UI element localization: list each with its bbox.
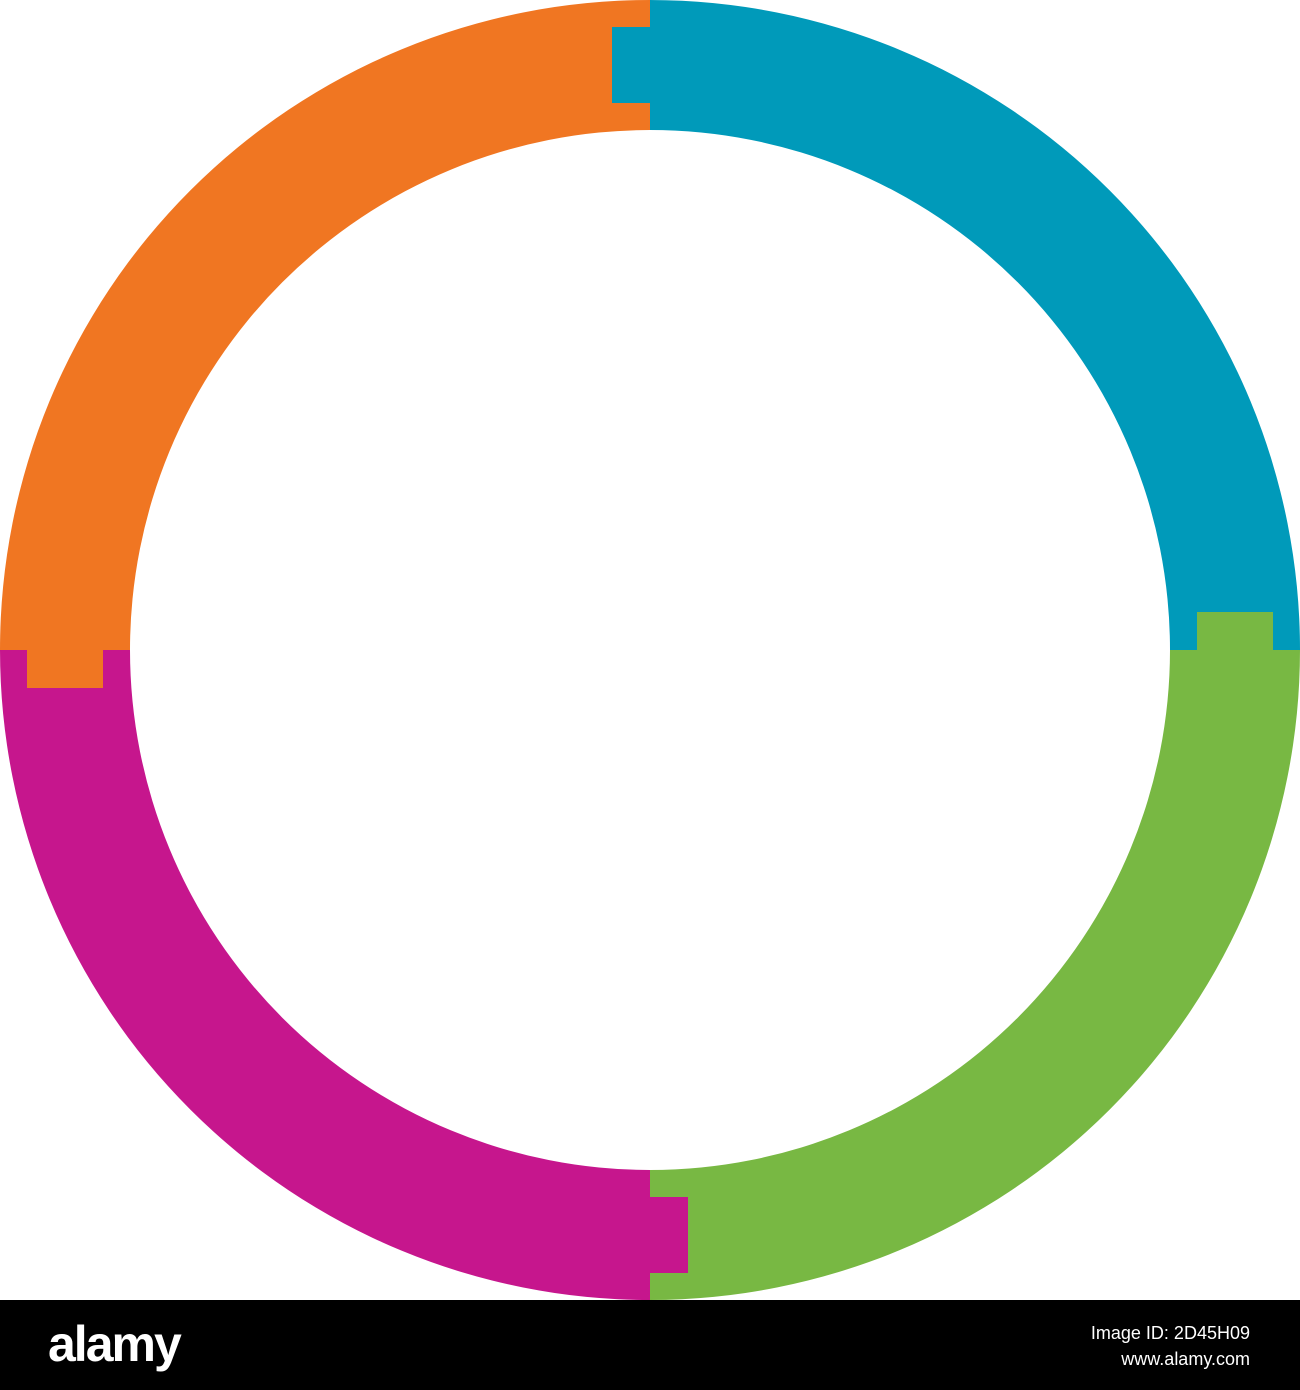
footer bar [0, 1300, 1300, 1390]
segment: green bottom-right [650, 650, 1300, 1300]
logo text: alamy [48, 1316, 180, 1372]
segment: magenta bottom-left [0, 650, 688, 1300]
segment: blue top-right [612, 0, 1300, 650]
segment: orange top-left [0, 0, 650, 688]
image id text [1091, 1323, 1250, 1369]
tab: green into blue [1197, 612, 1273, 650]
image id text: Image ID: 2D45H09 [1091, 1323, 1250, 1343]
image id text: www.alamy.com [1121, 1349, 1250, 1369]
